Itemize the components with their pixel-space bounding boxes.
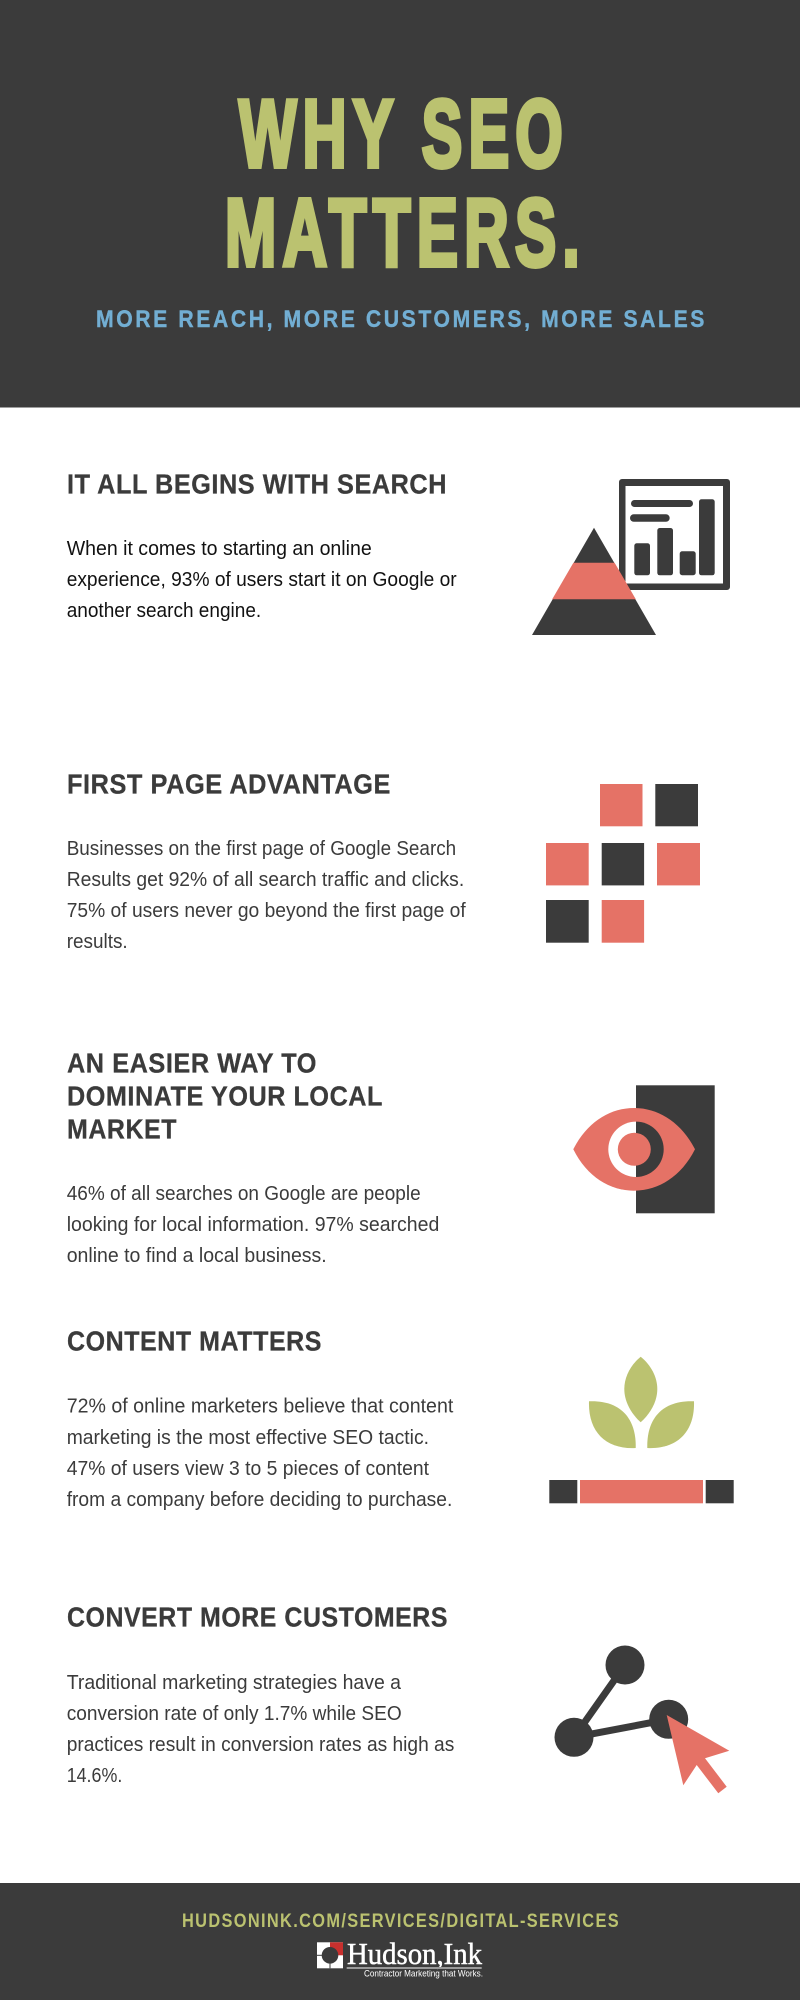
footer url: HUDSONINK.COM/SERVICES/DIGITAL-SERVICES xyxy=(182,1910,620,1932)
body text: experience, 93% of users start it on Google or xyxy=(67,569,457,591)
section: content matters xyxy=(67,1326,454,1511)
body text: When it comes to starting an online xyxy=(67,538,372,560)
subtitle: MORE REACH, MORE CUSTOMERS, MORE SALES xyxy=(96,306,707,333)
icon: eye xyxy=(573,1085,715,1213)
body text xyxy=(67,1183,439,1267)
heading: CONVERT MORE CUSTOMERS xyxy=(67,1602,448,1633)
body text: 14.6%. xyxy=(67,1765,122,1787)
title xyxy=(225,80,586,286)
body text xyxy=(67,1672,454,1787)
logo mark xyxy=(317,1942,343,1968)
body text: from a company before deciding to purchase. xyxy=(67,1489,452,1511)
logo tagline: Contractor Marketing that Works. xyxy=(364,1968,483,1980)
body text: marketing is the most effective SEO tactic. xyxy=(67,1427,429,1449)
section: easier way to dominate local market xyxy=(67,1048,439,1267)
heading xyxy=(67,1048,383,1145)
body text: Traditional marketing strategies have a xyxy=(67,1672,402,1694)
icon: plant xyxy=(549,1357,734,1503)
logo wordmark: Hudson,Ink xyxy=(347,1936,482,1971)
body text xyxy=(67,538,457,622)
footer panel xyxy=(0,1883,800,2000)
heading: CONTENT MATTERS xyxy=(67,1326,322,1357)
body text: 72% of online marketers believe that content xyxy=(67,1396,454,1418)
body text: looking for local information. 97% searched xyxy=(67,1214,439,1236)
section: it all begins with search xyxy=(67,468,457,622)
logo xyxy=(317,1936,483,1980)
header panel xyxy=(0,0,800,408)
body text: practices result in conversion rates as high as xyxy=(67,1734,454,1756)
body text: another search engine. xyxy=(67,600,261,622)
section: convert more customers xyxy=(67,1602,454,1787)
icon: pyramid and chart xyxy=(532,479,730,635)
title: MATTERS. xyxy=(225,180,586,286)
body text xyxy=(67,838,466,953)
heading: FIRST PAGE ADVANTAGE xyxy=(67,768,391,799)
body text: 75% of users never go beyond the first page of xyxy=(67,900,466,922)
section: first page advantage xyxy=(67,768,466,953)
title: WHY SEO xyxy=(239,80,569,188)
body text xyxy=(67,1396,454,1511)
heading: MARKET xyxy=(67,1114,177,1145)
heading: DOMINATE YOUR LOCAL xyxy=(67,1080,383,1111)
icon: squares grid xyxy=(546,784,700,943)
body text: results. xyxy=(67,931,128,953)
body text: Results get 92% of all search traffic and clicks. xyxy=(67,869,464,891)
icon: network and cursor xyxy=(554,1646,729,1793)
body text: 47% of users view 3 to 5 pieces of content xyxy=(67,1458,429,1480)
heading: IT ALL BEGINS WITH SEARCH xyxy=(67,468,447,499)
body text: online to find a local business. xyxy=(67,1245,327,1267)
body text: Businesses on the first page of Google Search xyxy=(67,838,456,860)
body text: conversion rate of only 1.7% while SEO xyxy=(67,1703,402,1725)
heading: AN EASIER WAY TO xyxy=(67,1048,317,1079)
body text: 46% of all searches on Google are people xyxy=(67,1183,421,1205)
